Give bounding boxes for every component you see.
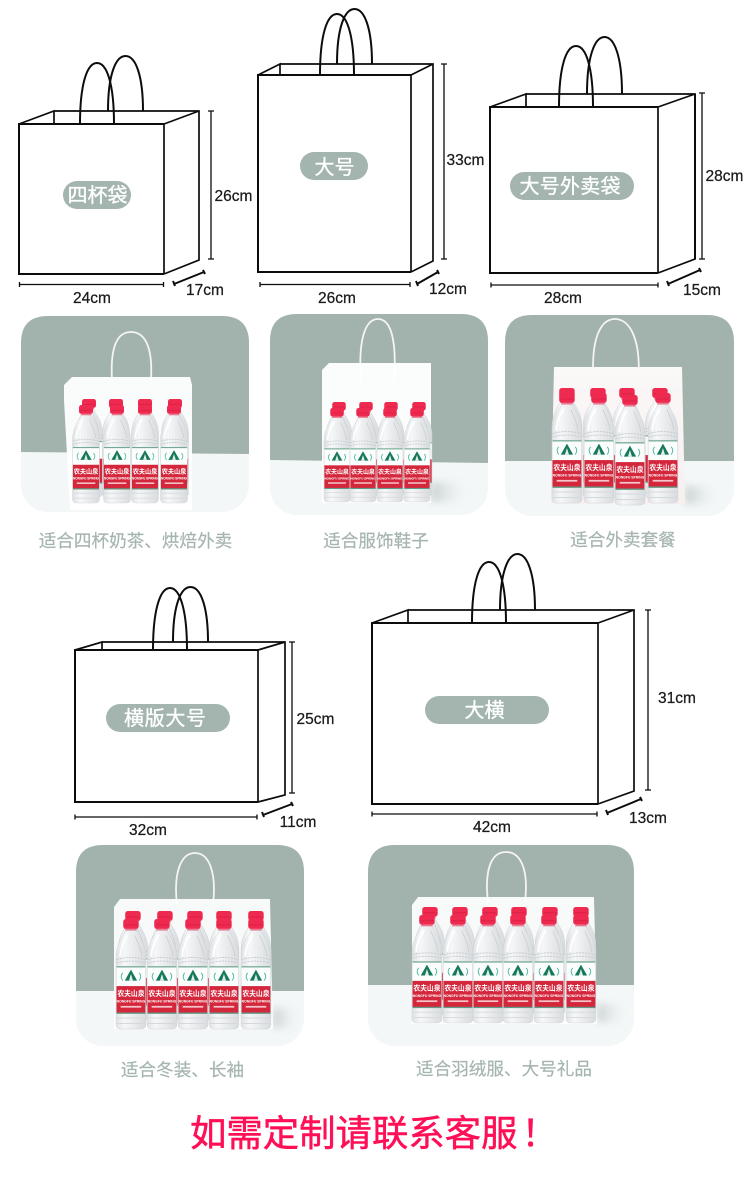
label pill — [300, 152, 368, 180]
size labels — [73, 188, 252, 307]
floor shadow — [273, 1008, 301, 1028]
bottles: NONGFU SPRING — [405, 476, 430, 480]
caption: 适合四杯奶茶、烘焙外卖 — [39, 531, 232, 551]
dimension lines — [491, 93, 705, 288]
size labels: 11cm — [280, 814, 316, 831]
size labels: 26cm — [318, 290, 356, 307]
label pill — [510, 172, 634, 200]
handle — [112, 332, 151, 380]
photo panel: 大号 — [270, 314, 488, 551]
bottles: 农夫山泉 — [649, 463, 677, 472]
bottles: NONGFU SPRING — [413, 994, 442, 998]
size labels: 25cm — [297, 711, 334, 728]
size labels — [544, 168, 743, 307]
handle — [176, 853, 214, 905]
bottles: 农夫山泉 — [74, 466, 99, 476]
photo panel: 四杯袋 — [21, 316, 249, 551]
bottles: NONGFU SPRING — [73, 476, 99, 481]
bottles: 农夫山泉 — [413, 983, 441, 993]
size labels: 28cm — [544, 290, 582, 307]
bottles: NONGFU SPRING — [553, 474, 582, 478]
size labels — [129, 711, 334, 839]
dimension lines — [75, 642, 295, 820]
bag outline — [372, 610, 634, 804]
bottles: NONGFU SPRING — [616, 476, 645, 480]
bottles: 农夫山泉 — [105, 466, 130, 476]
panel background — [505, 315, 734, 516]
handles — [472, 554, 535, 623]
bag diagram: 大号外卖袋 — [490, 37, 743, 307]
bag diagram: 四杯袋 — [19, 56, 252, 307]
panel background — [76, 845, 304, 1046]
label pill: 四杯袋 — [68, 184, 128, 207]
bottles: NONGFU SPRING — [117, 1000, 146, 1004]
handles — [80, 56, 143, 124]
bottles: NONGFU SPRING — [504, 994, 533, 998]
bottles — [72, 399, 189, 503]
bag diagram: 大号 — [258, 9, 484, 307]
bottles: NONGFU SPRING — [649, 474, 678, 478]
label pill — [425, 696, 549, 724]
label pill: 大横 — [464, 699, 504, 722]
bottles — [412, 907, 596, 1023]
size labels: 33cm — [447, 152, 484, 169]
bag outline — [19, 111, 199, 274]
bag diagram: 大横 — [372, 554, 696, 836]
caption: 适合羽绒服、大号礼品 — [416, 1059, 592, 1079]
caption: 适合服饰鞋子 — [323, 531, 429, 551]
bottles: NONGFU SPRING — [378, 476, 403, 480]
label pill: 横版大号 — [124, 707, 206, 730]
bottles: NONGFU SPRING — [161, 476, 187, 481]
bottles: 农夫山泉 — [179, 989, 207, 998]
bottles: 农夫山泉 — [162, 466, 187, 476]
size labels: 26cm — [215, 188, 252, 205]
bottles: NONGFU SPRING — [148, 1000, 177, 1004]
handle — [593, 319, 639, 385]
label pill: 大号 — [314, 156, 354, 179]
panel background — [368, 845, 634, 1046]
bottles: 农夫山泉 — [117, 989, 145, 998]
bag outline — [258, 64, 433, 272]
bottles: NONGFU SPRING — [179, 1000, 208, 1004]
bottles: NONGFU SPRING — [210, 1000, 239, 1004]
bottles: 农夫山泉 — [474, 983, 502, 993]
caption: 适合外卖套餐 — [570, 530, 676, 550]
bottles: NONGFU SPRING — [351, 476, 376, 480]
bottles: 农夫山泉 — [616, 465, 644, 474]
size labels — [473, 690, 696, 836]
white bag — [114, 899, 273, 1029]
handles — [559, 37, 622, 107]
bottles: 农夫山泉 — [351, 468, 375, 476]
size labels: 15cm — [683, 282, 721, 299]
size labels: 31cm — [658, 690, 696, 707]
size labels: 42cm — [473, 819, 511, 836]
bottles: 农夫山泉 — [148, 989, 176, 998]
footer call to action: 如需定制请联系客服！ — [190, 1113, 558, 1154]
bottles: 农夫山泉 — [504, 983, 532, 993]
floor shadow — [685, 486, 721, 504]
bag outline — [75, 642, 285, 802]
bottles: NONGFU SPRING — [325, 476, 350, 480]
caption: 适合冬装、长袖 — [121, 1060, 244, 1080]
label pill: 大号外卖袋 — [520, 175, 620, 198]
bottles — [324, 402, 432, 502]
floor shadow — [597, 1004, 629, 1022]
panel background — [21, 316, 249, 512]
bottles: 农夫山泉 — [325, 468, 349, 476]
label pill — [63, 181, 131, 209]
white bag — [412, 897, 597, 1024]
bottles: NONGFU SPRING — [567, 994, 596, 998]
bottles: 农夫山泉 — [535, 983, 563, 993]
bottles: NONGFU SPRING — [444, 994, 473, 998]
bottles: 农夫山泉 — [567, 983, 595, 993]
bottles: NONGFU SPRING — [474, 994, 503, 998]
size labels: 24cm — [73, 290, 111, 307]
size labels: 28cm — [706, 168, 743, 185]
bag diagram: 横版大号 — [75, 587, 334, 839]
bottles: NONGFU SPRING — [132, 476, 158, 481]
photo panel: 大号外卖袋 — [505, 315, 734, 550]
bottles — [116, 911, 271, 1029]
bottles: 农夫山泉 — [378, 468, 402, 476]
panel background — [270, 314, 488, 515]
handle — [487, 852, 526, 902]
bottles: 农夫山泉 — [444, 983, 472, 993]
photo panel: 横版大号 — [76, 845, 304, 1080]
bag outline — [490, 94, 695, 273]
dimension lines — [20, 111, 214, 287]
handles — [320, 9, 372, 75]
floor shadow — [431, 482, 471, 502]
size labels — [318, 152, 484, 307]
dimension lines — [260, 64, 447, 287]
white bag — [551, 367, 685, 504]
bottles: NONGFU SPRING — [242, 1000, 271, 1004]
bottles: 农夫山泉 — [553, 463, 581, 472]
photo panel: 大横 — [368, 845, 634, 1079]
bottles: NONGFU SPRING — [104, 476, 130, 481]
bottles: 农夫山泉 — [242, 989, 270, 998]
handle — [360, 319, 395, 382]
bottles: 农夫山泉 — [210, 989, 238, 998]
bottles: NONGFU SPRING — [585, 474, 614, 478]
bottles — [552, 388, 678, 505]
white bag — [64, 377, 192, 510]
size labels: 17cm — [186, 282, 224, 299]
bottles: NONGFU SPRING — [535, 994, 564, 998]
bottles: 农夫山泉 — [405, 468, 429, 476]
dimension lines — [372, 610, 651, 816]
handles — [153, 587, 208, 650]
bottles: 农夫山泉 — [133, 466, 158, 476]
size labels: 32cm — [129, 822, 167, 839]
size labels: 13cm — [629, 810, 667, 827]
label pill — [106, 704, 230, 732]
white bag — [322, 363, 431, 503]
size labels: 12cm — [429, 281, 467, 298]
bottles: 农夫山泉 — [585, 463, 613, 472]
